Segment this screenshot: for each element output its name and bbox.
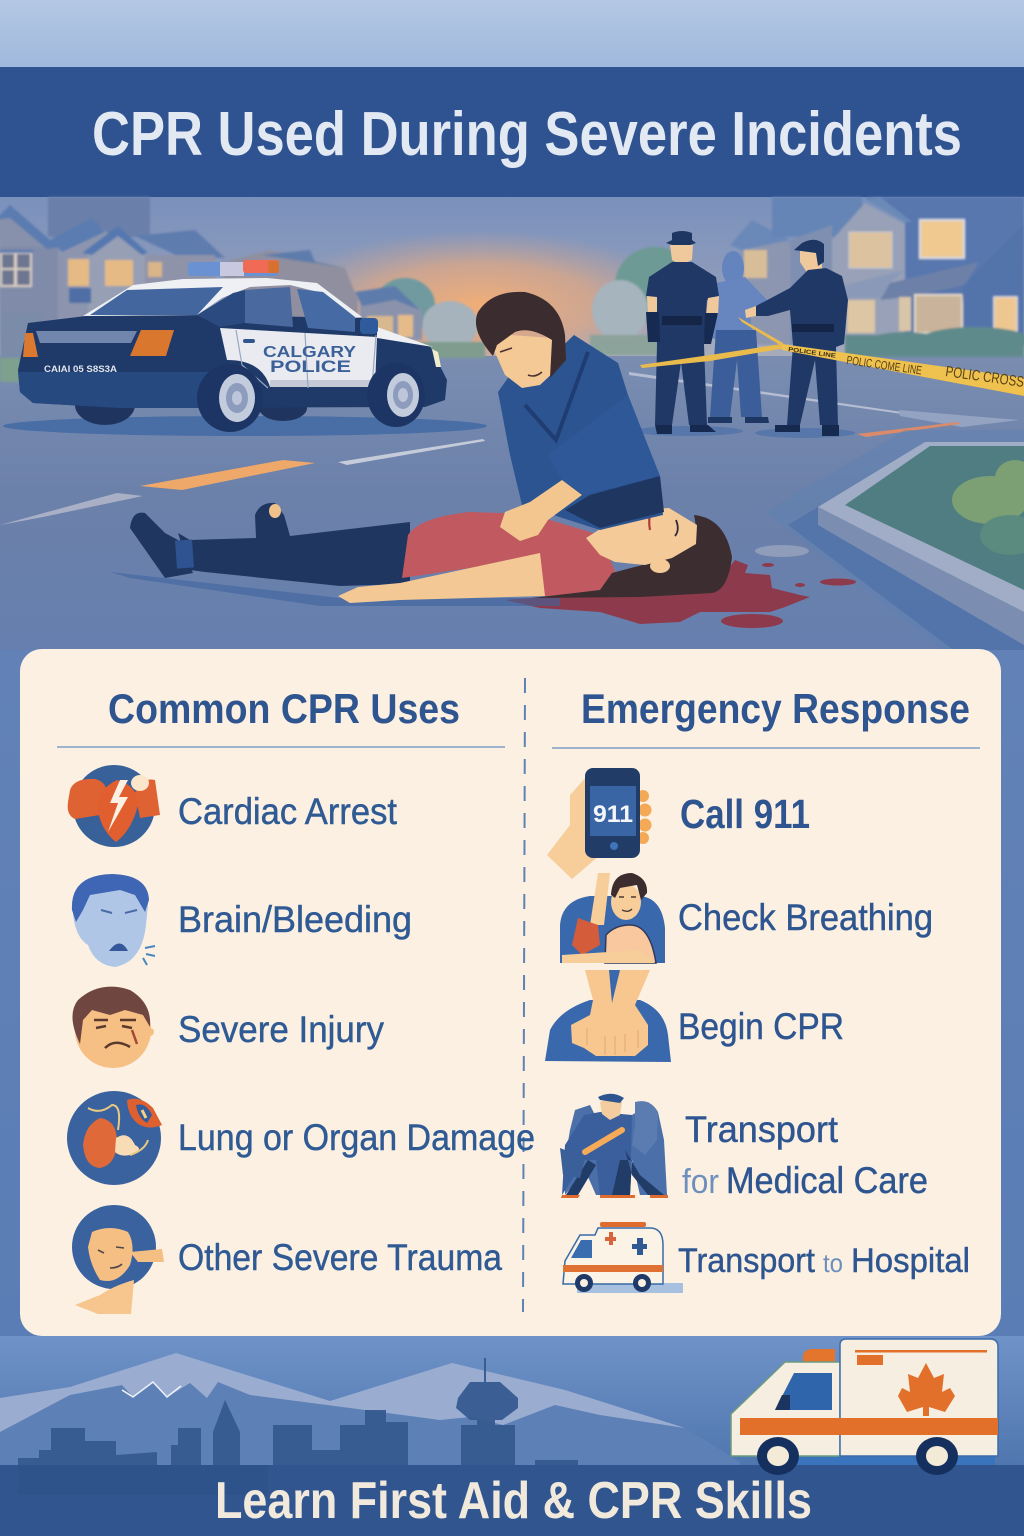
footer band [0,1465,1024,1536]
label: transport to hospital: Hospital [851,1242,970,1280]
eye and blood trace [675,520,678,536]
road markings [0,372,1019,525]
road [0,356,1024,655]
footer landscape [0,1336,1024,1536]
center dashed divider [523,678,525,1312]
legs and shoes [178,503,410,586]
icon: phone calling 911 [547,768,652,879]
column: common CPR uses [57,685,535,1314]
houses right [730,197,1024,357]
forearm and hands [500,480,582,541]
main info panel [20,649,1001,1336]
roof light [188,262,278,276]
car windows [90,287,223,315]
arm [338,553,545,603]
road patch [755,545,809,557]
side background behind panel [0,650,1024,1345]
ambulance shadow [770,1455,995,1465]
label: check breathing: Check Breathing [678,897,933,938]
far wheels [75,385,135,425]
victim shadow [110,572,560,606]
hair [476,292,566,378]
label: transport for medical care [682,1109,928,1201]
tail lights [23,333,38,357]
police tape [640,317,1024,396]
curb and green verge [765,430,1024,655]
footer call to action: Learn First Aid & CPR Skills [215,1472,812,1530]
label: brain or bleeding: Brain/Bleeding [178,899,412,940]
police car [3,260,487,436]
ambulance window [775,1373,832,1410]
houses left [0,197,422,382]
icon: other severe trauma [72,1205,164,1314]
car shadow [3,416,487,436]
front-right wheel [367,363,425,427]
icon: small ambulance [563,1222,683,1293]
police tape: POLICE LINE [788,347,836,360]
ambulance wheels [757,1437,799,1475]
shirt [402,512,620,596]
icon: paramedic team [560,1094,668,1198]
neck and face [586,508,697,565]
white roof [83,278,362,318]
label: cardiac arrest: Cardiac Arrest [178,791,398,832]
icon: brain bleeding face [72,874,155,967]
front-left wheel [197,364,263,432]
heading: common CPR uses: Common CPR Uses [108,685,460,732]
tape lettering: POLIC COME LINE [846,353,923,378]
head [493,335,556,388]
city skyline [18,1358,578,1470]
car body [18,315,447,408]
maple leaf [898,1363,955,1416]
icon: cardiac arrest heart [68,765,160,847]
icon: begin CPR hands [545,970,671,1062]
small skyline overlap [18,1465,268,1495]
label: transport to hospital: to [823,1248,843,1278]
label: transport to hospital: Transport [678,1242,816,1280]
icon: severe injury face [72,987,154,1068]
police officers [633,231,855,438]
label: severe injury: Severe Injury [178,1009,384,1050]
label: call 911: Call 911 [680,791,810,837]
right officer [745,240,848,436]
label: begin CPR: Begin CPR [678,1006,844,1047]
large ambulance [731,1339,998,1475]
top sky strip [0,0,1024,68]
blood pool [505,560,856,628]
police car: POLICE [270,358,351,376]
center officer [708,251,769,423]
phone number: 911 [593,801,633,828]
car lettering: CALGARY [263,344,356,361]
label: transport for medical care: for [682,1163,719,1201]
heading: emergency response: Emergency Response [581,685,970,732]
mountains [0,1353,740,1470]
ambulance cab [731,1362,840,1456]
headlight [432,349,441,367]
officer shadows [633,426,743,436]
scene sky [0,197,1024,362]
footer sky [0,1336,1024,1471]
license plate: CAIAI 05 S8S3A [44,364,118,374]
ambulance box [840,1339,998,1456]
jacket [498,335,663,530]
hair [532,515,732,598]
label: transport for medical care: Transport [685,1109,839,1150]
ambulance stripe [740,1418,998,1435]
column: emergency response [545,685,980,1293]
door lines [236,330,376,388]
label: lung or organ damage: Lung or Organ Damage [178,1117,535,1158]
responder performing CPR [476,292,664,541]
label: transport for medical care: Medical Care [726,1160,928,1201]
distant trees [375,247,695,358]
title banner [0,67,1024,197]
icon: lung or organ damage [67,1091,162,1185]
icon: check breathing [560,873,665,963]
ambulance beacon [803,1349,835,1362]
ear [650,559,670,573]
left officer [646,231,719,434]
label: other severe trauma: Other Severe Trauma [178,1237,502,1278]
label: transport to hospital [678,1242,970,1280]
illustrated emergency scene [0,197,1024,655]
victim lying on the road [110,503,732,606]
